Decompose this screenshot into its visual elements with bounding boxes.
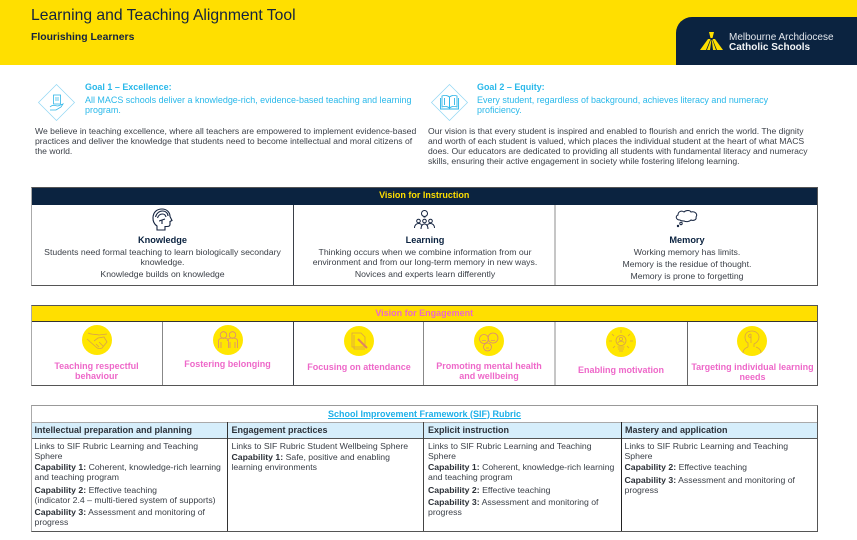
heading: intellectual preparation: Intellectual preparation and planning <box>34 425 192 435</box>
cell: focusing on attendance <box>294 322 424 384</box>
goal 2 heading: Goal 2 – Equity: <box>477 82 545 92</box>
learning text: Thinking occurs when we combine information from our <box>319 246 531 256</box>
heading: mastery and application: Mastery and application <box>625 425 728 435</box>
goal 1 statement <box>85 94 411 115</box>
icon: thought bubble <box>676 210 698 228</box>
links text: Links to SIF Rubric Learning and Teaching <box>34 441 198 451</box>
logo text: Catholic Schools <box>729 42 810 53</box>
icon: diamond with hand and book <box>38 84 75 121</box>
logo text <box>729 32 834 53</box>
icon: lightbulb with rays <box>606 327 636 357</box>
cell: promoting mental health <box>424 322 556 384</box>
links text: Links to SIF Rubric Learning and Teaching <box>428 441 592 451</box>
column: mastery and application: Capability 3: Assessment and monitoring of <box>624 475 795 485</box>
icon: document and pencil <box>344 326 374 356</box>
heading: engagement practices: Engagement practices <box>232 425 328 435</box>
memory heading: Memory <box>669 235 705 245</box>
column: engagement practices: Capability 1: Safe, positive and enabling <box>232 452 390 462</box>
icon: diamond with open book <box>431 84 468 121</box>
cell: enabling motivation <box>556 322 688 384</box>
goal 2 description: does. Our educators are dedicated to providing all students with fundamental literacy and numeracy <box>428 146 808 156</box>
cell: promoting mental health: and wellbeing <box>459 371 519 381</box>
logo panel <box>676 17 857 64</box>
column: mastery and application: Capability 2: Effective teaching <box>624 462 747 472</box>
column: explicit instruction <box>424 422 622 531</box>
icon: two people <box>213 325 243 355</box>
goal 2 statement: Every student, regardless of background, achieves literacy and numeracy <box>477 94 768 104</box>
cell: targeting individual learning needs <box>691 326 814 382</box>
goal 2 description: Our vision is that every student is inspired and enabled to flourish and enrich the world. The dignity <box>428 126 804 136</box>
column: learning: Novices and experts learn differently <box>355 268 495 278</box>
goal 2 description: and worth of each student is valued, which places the individual student at the heart of what MACS <box>428 136 804 146</box>
panel: vision for engagement <box>30 305 818 386</box>
cell: teaching respectful behaviour <box>32 322 162 384</box>
goal 1 statement: program. <box>85 105 121 115</box>
icon: head with brain <box>152 208 173 230</box>
column headings row <box>32 422 817 439</box>
column: memory <box>623 210 751 280</box>
links text: Links to SIF Rubric Learning and Teaching <box>624 441 788 451</box>
goal 1 description: the world. <box>35 146 72 156</box>
column: intellectual preparation: (indicator 2.4 – multi-tiered system of supports) <box>34 495 216 505</box>
label: Fostering belonging <box>184 359 271 369</box>
label: Promoting mental health <box>436 361 542 371</box>
column: intellectual preparation: progress <box>34 517 68 527</box>
header band <box>0 0 857 64</box>
column: knowledge <box>32 204 294 284</box>
column: intellectual preparation <box>32 422 228 531</box>
instruction heading bar: Vision for Instruction <box>379 190 469 200</box>
panel: goal 1 excellence <box>35 82 416 156</box>
learning heading: Learning <box>406 235 444 245</box>
column: intellectual preparation: Capability 3: Assessment and monitoring of <box>34 507 205 517</box>
cell: teaching respectful behaviour: behaviour <box>75 371 118 381</box>
label: Enabling motivation <box>578 365 664 375</box>
icon: people with lightbulb <box>414 210 435 229</box>
icon: logo mark <box>700 32 723 50</box>
heading: explicit instruction: Explicit instruction <box>428 425 509 435</box>
subtitle: Flourishing Learners <box>31 32 134 43</box>
goal 2 statement <box>477 94 768 115</box>
column: knowledge: knowledge. <box>141 256 184 266</box>
column: intellectual preparation: and teaching program <box>34 472 119 482</box>
column: learning: environment and from our long-term memory in new ways. <box>313 256 537 266</box>
title: Learning and Teaching Alignment Tool <box>31 7 296 24</box>
column: mastery and application <box>624 441 795 495</box>
column: engagement practices: learning environments <box>232 462 317 472</box>
icon: handshake <box>82 325 112 355</box>
goal 1 description <box>35 126 416 156</box>
logo text: Melbourne Archdiocese <box>729 32 834 43</box>
goal 2 statement: proficiency. <box>477 105 522 115</box>
goal 2 description: skills, ensuring their active engagement in society while fostering lifelong learning. <box>428 156 740 166</box>
panel: goal 2 equity <box>428 82 808 166</box>
knowledge heading: Knowledge <box>138 235 187 245</box>
column: knowledge: Knowledge builds on knowledge <box>100 268 225 278</box>
goal 1 statement: All MACS schools deliver a knowledge-rich, evidence-based teaching and learning <box>85 94 411 104</box>
cell: targeting individual learning needs: needs <box>739 372 766 382</box>
goal 1 description: practices and deliver the knowledge that students need to become intellectual and moral citizens of <box>35 136 412 146</box>
panel: SIF rubric <box>30 405 818 532</box>
column: mastery and application: progress <box>624 485 658 495</box>
column: explicit instruction: Sphere <box>428 451 456 461</box>
goal 1 description: We believe in teaching excellence, where all teachers are empowered to implement evidence-based <box>35 126 416 136</box>
column: explicit instruction: and teaching program <box>428 472 513 482</box>
column: intellectual preparation: Capability 1: Coherent, knowledge-rich learning <box>34 462 221 472</box>
label: Teaching respectful <box>54 361 139 371</box>
panel: vision for instruction <box>30 187 818 286</box>
column: learning <box>294 204 556 284</box>
instruction heading bar <box>32 188 817 204</box>
column: explicit instruction: Capability 1: Coherent, knowledge-rich learning <box>428 462 614 472</box>
column: intellectual preparation: Sphere <box>34 451 63 461</box>
column: memory: Memory is the residue of thought. <box>623 259 751 269</box>
label: Targeting individual learning <box>691 362 814 372</box>
column: intellectual preparation: Capability 2: Effective teaching <box>34 485 157 495</box>
cell: fostering belonging <box>162 322 294 384</box>
icon: head outline <box>737 326 767 356</box>
engagement heading bar: Vision for Engagement <box>375 308 473 318</box>
label: Focusing on attendance <box>307 362 411 372</box>
column: explicit instruction: Capability 2: Effective teaching <box>428 485 550 495</box>
links text: Links to SIF Rubric Student Wellbeing Sphere <box>232 441 408 451</box>
icon: faces <box>474 326 504 356</box>
column: engagement practices <box>228 422 424 531</box>
memory text: Working memory has limits. <box>634 246 740 256</box>
column: explicit instruction: Capability 3: Assessment and monitoring of <box>428 497 598 507</box>
SIF heading link: School Improvement Framework (SIF) Rubric <box>328 408 521 418</box>
column: memory: Memory is prone to forgetting <box>630 270 744 280</box>
column: explicit instruction: progress <box>428 507 462 517</box>
engagement heading bar <box>32 306 817 322</box>
knowledge text: Students need formal teaching to learn biologically secondary <box>44 246 281 256</box>
column: mastery and application: Sphere <box>624 451 653 461</box>
goal 2 description <box>428 126 808 166</box>
goal 1 heading: Goal 1 – Excellence: <box>85 82 172 92</box>
